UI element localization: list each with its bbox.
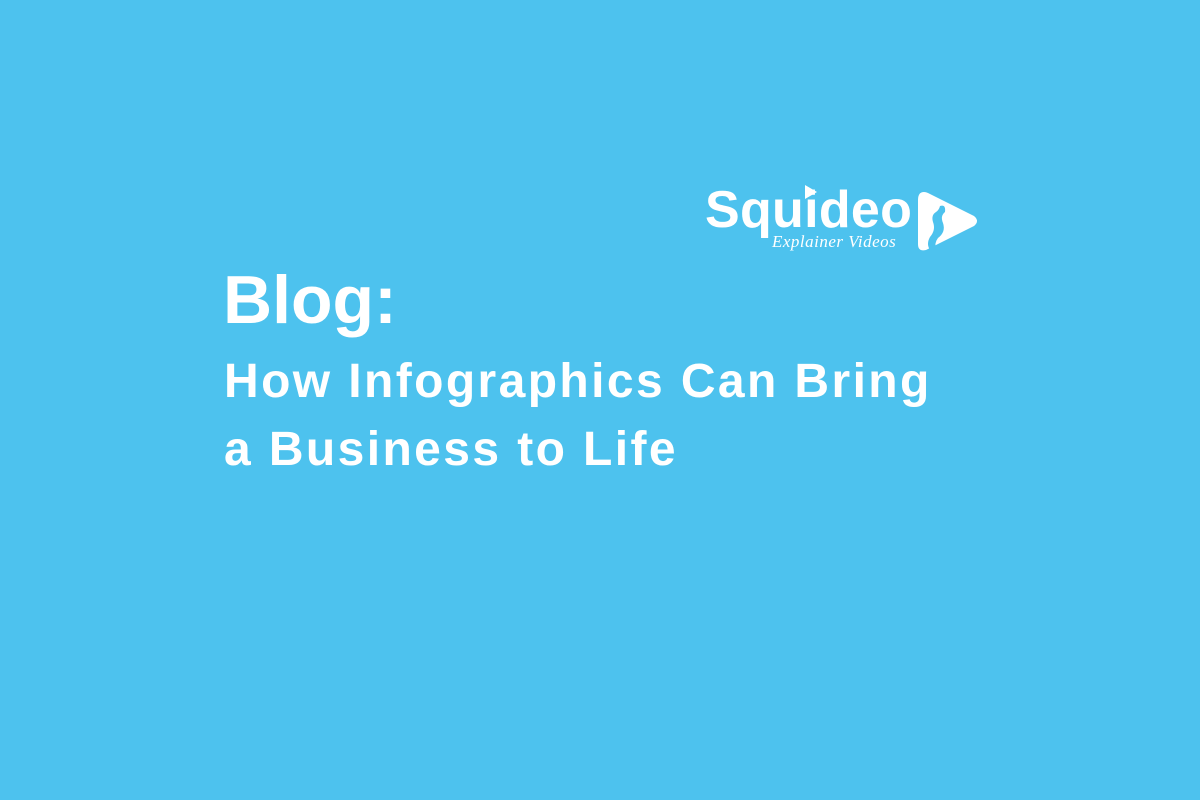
icon: play squid (918, 192, 977, 250)
subtitle: How Infographics Can Bring (224, 355, 932, 408)
subtitle: a Business to Life (224, 423, 678, 476)
logo tagline: Explainer Videos (772, 232, 896, 251)
subtitle (224, 355, 932, 476)
title: Blog: (223, 262, 397, 338)
icon: small play (805, 185, 817, 199)
logo wordmark: Squideo (705, 181, 912, 239)
logo (705, 181, 977, 251)
